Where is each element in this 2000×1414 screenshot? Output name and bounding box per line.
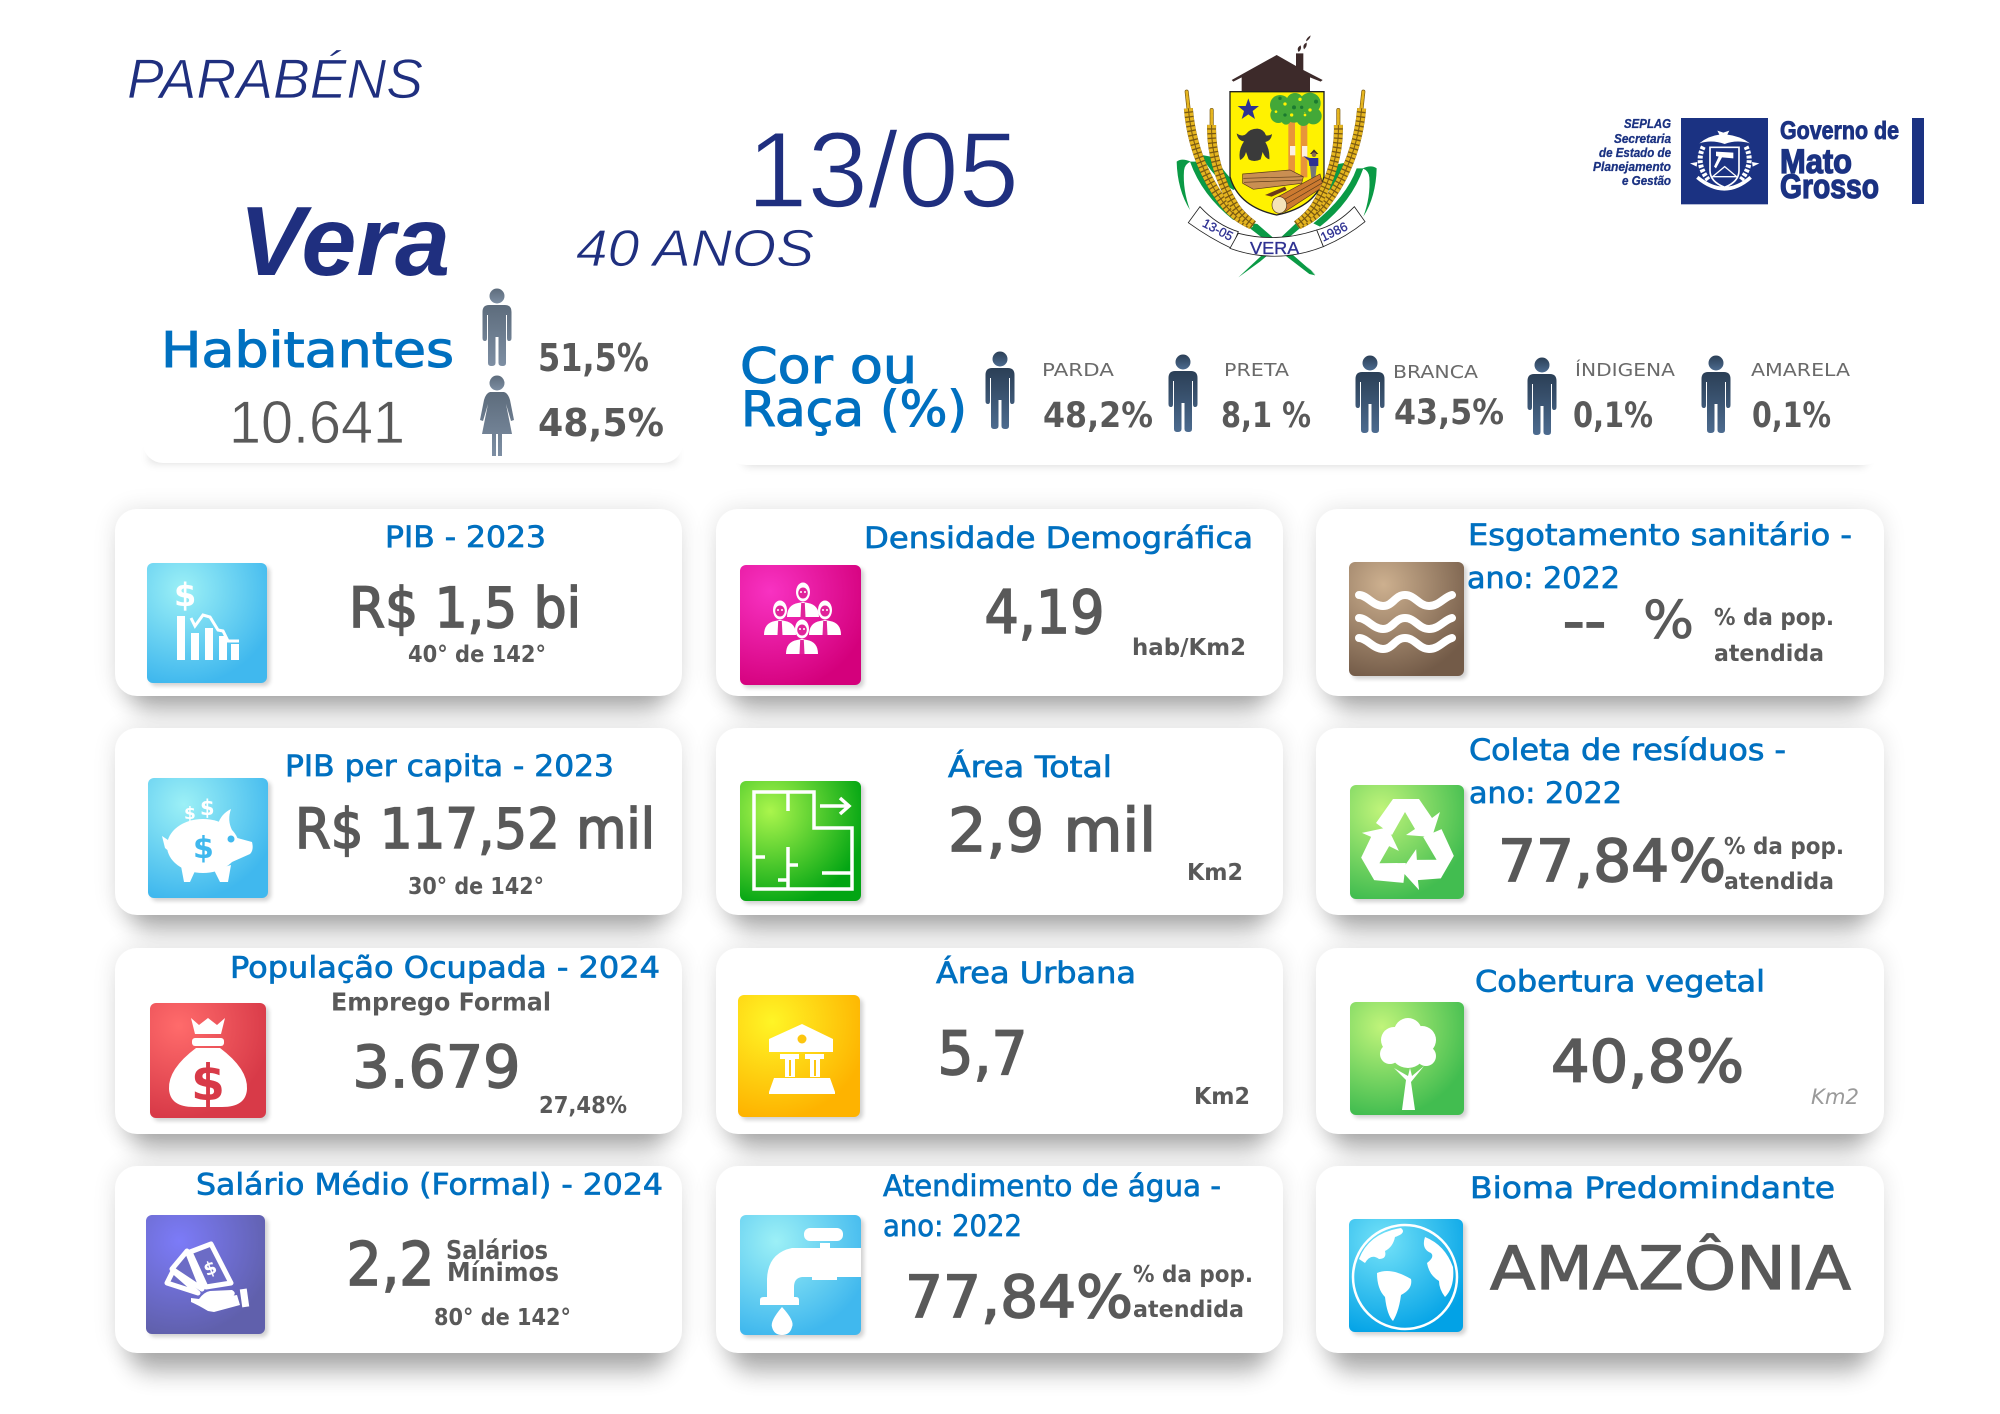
value: 2,2 — [346, 1230, 434, 1300]
value: population: 10.641 — [229, 389, 405, 456]
panel: População Ocupada — [115, 948, 682, 1134]
value — [1563, 591, 1694, 652]
unit: Km2 — [1811, 1085, 1859, 1109]
heading: PIB per capita - 2023 — [285, 749, 614, 783]
text: Governo de Mato Grosso: Mato — [1780, 143, 1852, 181]
icon: waves — [1349, 562, 1467, 679]
icon: hand with banknotes — [146, 1215, 268, 1337]
heading: Cor ou Raça (%): Raça (%) — [741, 381, 967, 438]
item: Amarela: AMARELA — [1751, 360, 1851, 381]
item: Amarela — [1702, 356, 1851, 436]
heading: PIB - 2023 — [385, 520, 546, 554]
text: Governo de Mato Grosso: Grosso — [1780, 168, 1879, 206]
panel: Atendimento de água — [716, 1166, 1283, 1353]
heading — [883, 1169, 1221, 1243]
heading: Esgotamento sanitário - — [1468, 518, 1852, 552]
item: Parda — [986, 352, 1153, 436]
logo: SEPLAG Governo de Mato Grosso — [1593, 117, 1924, 206]
share: 27,48% — [539, 1093, 627, 1119]
text: SEPLAG secretariat name: Secretaria — [1614, 132, 1671, 146]
unit: % da pop. — [1714, 605, 1834, 631]
unit: atendida — [1133, 1297, 1244, 1323]
icon: money bag: $ — [191, 1054, 225, 1112]
panel: Bioma Predomindante — [1316, 1166, 1884, 1353]
item: Indígena: 0,1% — [1573, 396, 1653, 436]
value: 4,19 — [984, 578, 1104, 648]
unit — [446, 1236, 559, 1288]
item: Branca — [1356, 356, 1504, 433]
value: women share: 48,5% — [538, 401, 664, 445]
heading: 40 ANOS: 40 ANOS — [576, 220, 814, 278]
panel: Salário Médio — [115, 1166, 682, 1353]
text: SEPLAG secretariat name: de Estado de — [1599, 146, 1671, 160]
icon: coat of arms of Vera: VERA — [1250, 238, 1300, 258]
heading: Cobertura vegetal — [1475, 964, 1765, 998]
rank: 30° de 142° — [408, 874, 544, 900]
unit: hab/Km2 — [1132, 635, 1246, 661]
unit: Km2 — [1194, 1084, 1250, 1110]
heading: Área Urbana — [936, 956, 1136, 990]
heading: Cor ou Raça (%) — [740, 338, 967, 438]
heading: ano: 2022 — [883, 1209, 1022, 1243]
icon: falling chart: $ — [174, 576, 196, 614]
value: 3.679 — [352, 1033, 520, 1101]
icon: people — [740, 565, 864, 688]
panel: PIB — [115, 509, 682, 696]
unit: Km2 — [1187, 860, 1243, 886]
rank: 40° de 142° — [408, 642, 546, 668]
panel: Esgotamento sanitário — [1316, 509, 1884, 696]
value: men share: 51,5% — [538, 336, 649, 380]
value: % — [1643, 591, 1694, 651]
heading: Bioma Predomindante — [1470, 1171, 1835, 1205]
panel: Área Total — [716, 728, 1283, 915]
unit: Salários — [446, 1236, 548, 1266]
item: Indígena — [1528, 358, 1676, 436]
icon: money bag — [150, 1003, 269, 1121]
icon: water tap — [740, 1215, 864, 1338]
icon: coat of arms of Vera: 1986 — [1318, 220, 1350, 244]
heading: PARABÉNS: PARABÉNS — [127, 47, 423, 110]
icon: state emblem — [1681, 118, 1768, 204]
panel: PIB per capita — [115, 728, 682, 915]
heading: Atendimento de água - — [883, 1169, 1221, 1203]
item: Branca: BRANCA — [1393, 362, 1479, 383]
heading: Cor ou Raça (%): Cor ou — [740, 338, 917, 395]
heading: Salário Médio (Formal) - 2024 — [196, 1168, 663, 1202]
icon: man — [482, 288, 512, 366]
heading — [1469, 733, 1786, 810]
unit: atendida — [1724, 869, 1834, 895]
text: SEPLAG secretariat name — [1593, 117, 1671, 188]
icon: hand with banknotes: $ — [201, 1257, 220, 1281]
panel: Coleta de resíduos — [1316, 728, 1884, 915]
unit: Mínimos — [447, 1258, 559, 1288]
unit — [1724, 834, 1844, 895]
heading: ano: 2022 — [1469, 776, 1622, 810]
icon: piggy bank: $ — [184, 804, 196, 824]
text: SEPLAG secretariat name: SEPLAG — [1624, 117, 1671, 131]
item: Indígena: ÍNDIGENA — [1575, 359, 1676, 381]
item: Branca: 43,5% — [1394, 393, 1504, 433]
icon: coat of arms of Vera: 13-05 — [1200, 216, 1235, 244]
unit — [1714, 605, 1834, 667]
value: 77,84% — [905, 1263, 1133, 1331]
icon: piggy bank — [148, 778, 271, 901]
value: AMAZÔNIA — [1490, 1233, 1851, 1304]
panel: Habitantes — [143, 285, 683, 463]
item: Preta: 8,1 % — [1221, 396, 1311, 436]
value: 40,8% — [1551, 1028, 1744, 1096]
icon: woman — [480, 376, 514, 456]
item: Preta: PRETA — [1224, 360, 1290, 381]
icon: falling chart — [147, 563, 270, 686]
item: Amarela: 0,1% — [1752, 396, 1831, 436]
panel: Cor ou Raça — [726, 320, 1884, 465]
icon: piggy bank: $ — [193, 831, 214, 866]
icon: tree — [1350, 1002, 1467, 1118]
text: Governo de Mato Grosso — [1780, 117, 1899, 206]
heading: Densidade Demográfica — [864, 521, 1253, 555]
icon: coat of arms of Vera — [1177, 35, 1377, 277]
heading: Área Total — [948, 750, 1112, 784]
value: R$ 1,5 bi — [349, 576, 581, 640]
unit: % da pop. — [1724, 834, 1844, 860]
icon: piggy bank: $ — [200, 796, 215, 820]
value: 77,84% — [1498, 827, 1726, 895]
unit: % da pop. — [1133, 1262, 1253, 1288]
rank: 80° de 142° — [434, 1305, 571, 1331]
value: -- — [1563, 592, 1606, 652]
icon: floor plan — [740, 781, 864, 904]
value: 2,9 mil — [948, 796, 1156, 866]
heading: População Ocupada - 2024 — [230, 950, 660, 984]
heading: Vera: Vera — [239, 186, 450, 296]
icon: bank building — [738, 995, 863, 1120]
icon: recycle — [1350, 785, 1467, 902]
heading: ano: 2022 — [1467, 561, 1620, 595]
heading: date 13/05: 13/05 — [747, 109, 1019, 230]
text: SEPLAG secretariat name: Planejamento — [1593, 160, 1671, 174]
unit — [1133, 1262, 1253, 1323]
text: SEPLAG secretariat name: e Gestão — [1622, 174, 1671, 188]
heading: Habitantes: Habitantes — [161, 322, 454, 379]
panel: Densidade Demográfica — [716, 509, 1283, 696]
value: R$ 117,52 mil — [295, 797, 655, 861]
panel: Cobertura vegetal — [1316, 948, 1884, 1134]
icon: globe — [1349, 1219, 1466, 1335]
item: Parda: PARDA — [1042, 360, 1115, 381]
unit: atendida — [1714, 641, 1824, 667]
text: Governo de Mato Grosso: Governo de — [1780, 117, 1899, 145]
heading: Coleta de resíduos - — [1469, 733, 1786, 767]
panel: Área Urbana — [716, 948, 1283, 1134]
value: 5,7 — [938, 1019, 1028, 1089]
subheading: Emprego Formal — [331, 988, 551, 1016]
heading — [1467, 518, 1852, 595]
item: Preta — [1168, 354, 1311, 436]
item: Parda: 48,2% — [1043, 396, 1153, 436]
